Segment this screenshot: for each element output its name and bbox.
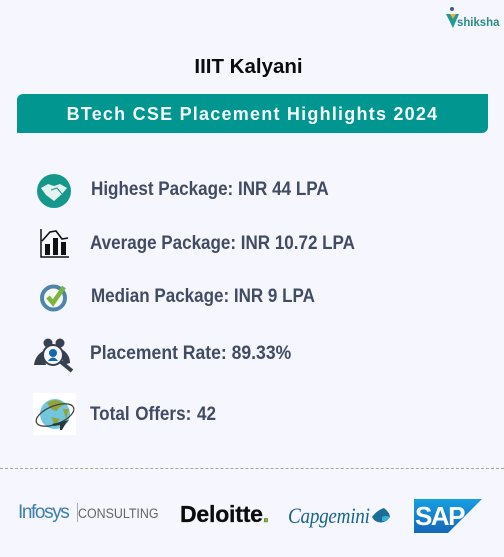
icon: people with magnifier [34, 338, 74, 372]
logo: deloitte: Deloitte. [180, 501, 269, 527]
banner heading: BTech CSE Placement Highlights 2024 [67, 104, 438, 124]
icon: handshake [37, 174, 71, 208]
stat: placement rate: Placement Rate: 89.33% [90, 343, 291, 364]
logo: SAP: SAP [415, 501, 465, 531]
stat: median package: Median Package: INR 9 LPA [91, 286, 315, 307]
banner [17, 94, 488, 133]
icon: check mark [40, 284, 67, 312]
stat: highest package: Highest Package: INR 44 LPA [91, 179, 329, 200]
logo: infosys consulting: CONSULTING [78, 506, 159, 521]
divider [0, 468, 504, 469]
logo: capgemini: Capgemini [288, 503, 370, 528]
stat: total offers: Total Offers: 42 [90, 404, 216, 425]
icon: bar chart [40, 229, 69, 258]
icon: globe with plane [33, 393, 76, 435]
logo: infosys consulting: Infosys [18, 502, 68, 523]
logo: infosys consulting [18, 502, 159, 523]
title: IIIT Kalyani [194, 55, 303, 78]
logo: shiksha: shiksha [457, 15, 499, 29]
logo: shiksha [446, 7, 500, 29]
stat: average package: Average Package: INR 10.72 LPA [90, 233, 355, 254]
logo: SAP [414, 499, 482, 533]
